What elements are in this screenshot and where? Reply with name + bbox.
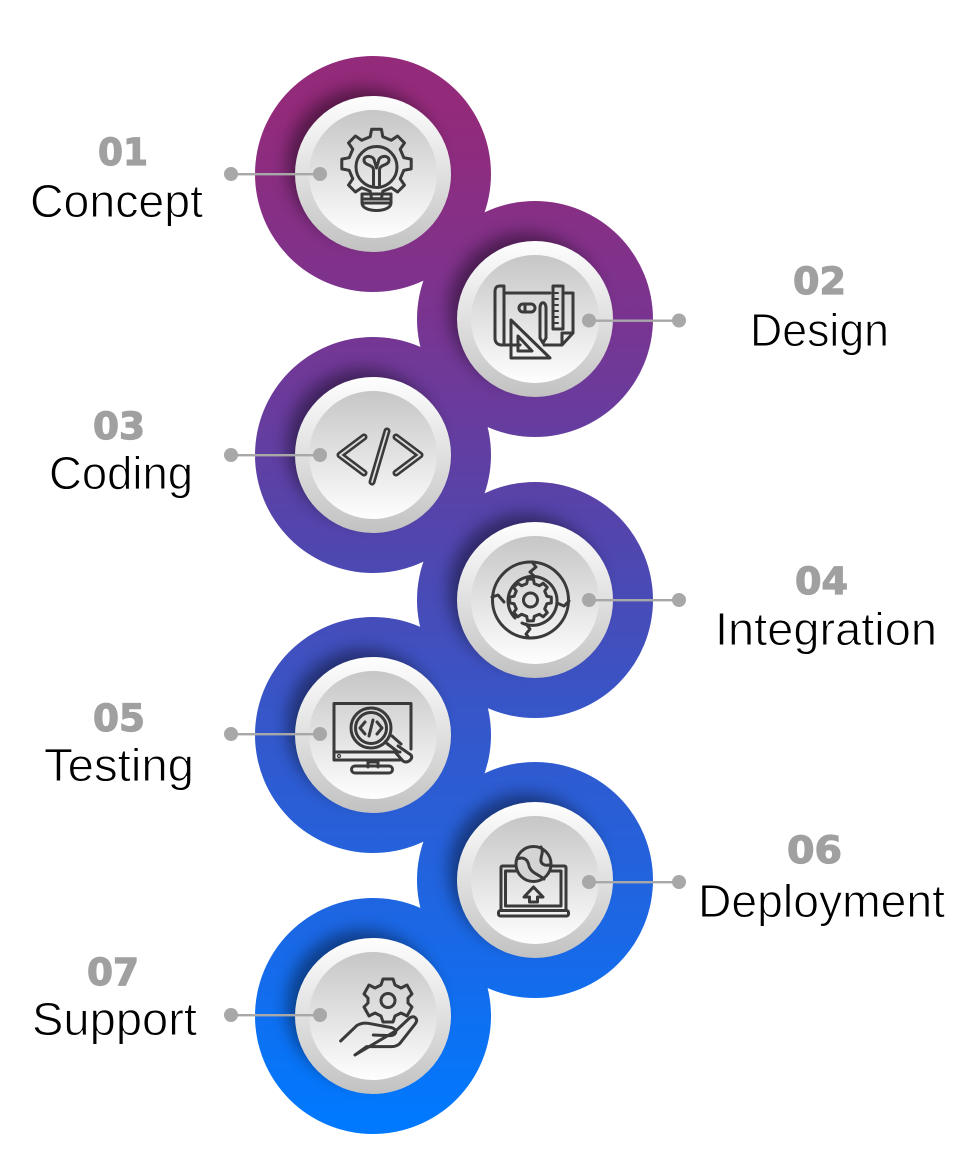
button 04 <box>457 522 613 678</box>
label Coding: Coding <box>49 447 193 499</box>
step 05 <box>44 657 451 813</box>
label Deployment: Deployment <box>698 875 945 927</box>
connector 07 <box>224 1008 327 1022</box>
number 01: 01 <box>98 131 148 174</box>
button 01 <box>295 96 451 252</box>
icon: hand holding gear <box>341 979 417 1055</box>
step 04 <box>457 522 937 678</box>
number 02: 02 <box>793 260 846 303</box>
inner shadows behind buttons <box>287 88 601 1082</box>
connector 05 <box>224 727 327 741</box>
step 03 <box>49 377 451 533</box>
button 02 <box>457 241 613 397</box>
step 02 <box>457 241 889 397</box>
icon: monitor with magnifier <box>334 704 412 773</box>
connector 03 <box>224 448 327 462</box>
connector 06 <box>582 875 686 889</box>
button 05 <box>295 657 451 813</box>
button 07 <box>295 938 451 1094</box>
connector 02 <box>582 314 686 328</box>
step 06 <box>457 802 945 958</box>
number 07: 07 <box>87 951 139 994</box>
number 06: 06 <box>787 829 842 872</box>
label Design: Design <box>750 304 889 356</box>
icon: gear in rings <box>492 562 569 638</box>
connector 01 <box>224 167 327 181</box>
icon: laptop with globe upload <box>498 846 568 916</box>
connector 04 <box>582 593 686 607</box>
button 06 <box>457 802 613 958</box>
chain of gradient circles <box>255 56 653 1134</box>
number 05: 05 <box>93 697 145 740</box>
label Support: Support <box>32 993 197 1045</box>
icon: code brackets <box>340 431 420 482</box>
label Concept: Concept <box>30 175 203 227</box>
number 03: 03 <box>93 405 145 448</box>
icon: blueprint and tools <box>495 286 573 358</box>
label Testing: Testing <box>44 739 194 791</box>
button 03 <box>295 377 451 533</box>
icon: gear light bulb <box>342 129 411 210</box>
label Integration: Integration <box>715 603 937 655</box>
step 01 <box>30 96 451 252</box>
number 04: 04 <box>795 560 848 603</box>
step 07 <box>32 938 451 1094</box>
